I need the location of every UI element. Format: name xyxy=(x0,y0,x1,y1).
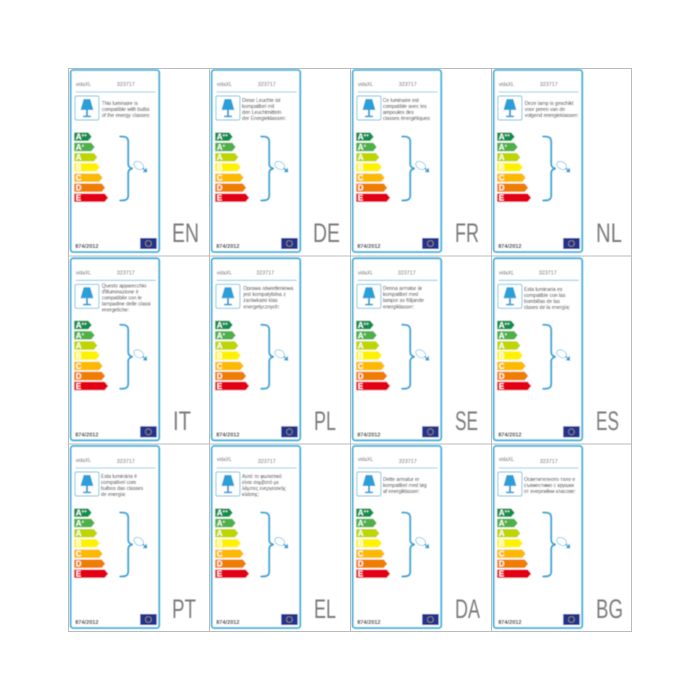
energy class scale: B xyxy=(76,539,82,548)
label frame xyxy=(212,70,300,252)
icon: bulb xyxy=(273,536,288,548)
energy class scale: A xyxy=(358,153,364,162)
compatibility text: Oprawa oświetleniowa xyxy=(243,286,294,292)
icon: bulb xyxy=(132,160,147,172)
energy class scale: A xyxy=(358,509,363,518)
compatibility text: съвместимо с крушки xyxy=(524,483,574,489)
panel: PL xyxy=(212,258,300,440)
energy class scale: C xyxy=(499,550,505,559)
energy class scale: A xyxy=(358,321,363,330)
energy class scale: ++ xyxy=(363,509,369,514)
compatibility text: energetiche: xyxy=(102,308,129,314)
energy class scale: A xyxy=(358,143,363,152)
compatibility text: Αυτό το φωτιστικό xyxy=(242,473,282,480)
energy class scale: C xyxy=(499,362,505,371)
compatibility text: Esta luminária é xyxy=(101,474,137,480)
energy class scale: B xyxy=(358,351,364,360)
language code IT: IT xyxy=(173,406,191,436)
language code FR: FR xyxy=(455,218,479,248)
label frame xyxy=(353,70,441,252)
compatibility text: lampadine delle classi xyxy=(102,302,151,308)
energy class scale: A xyxy=(217,321,222,330)
energy class scale: D xyxy=(499,184,505,193)
energy class scale: A xyxy=(217,341,223,350)
icon: bulb xyxy=(414,160,429,172)
energy class scale: D xyxy=(499,560,505,569)
product code: 323717 xyxy=(258,459,276,465)
compatibility text: d'illuminazione è xyxy=(102,289,139,295)
energy class scale: + xyxy=(222,332,225,337)
energy class scale: A xyxy=(76,341,82,350)
regulation number: 874/2012 xyxy=(498,620,522,626)
energy class scale: A xyxy=(499,153,505,162)
compatibility text: Deze lamp is geschikt xyxy=(525,101,574,107)
energy class scale: ++ xyxy=(81,321,87,326)
compatibility text: volgend energieklassen: xyxy=(525,113,579,119)
compatibility text: bombillas de las xyxy=(524,299,560,305)
energy class scale: B xyxy=(499,163,505,172)
energy class scale: A xyxy=(358,529,364,538)
panel: BG xyxy=(494,446,582,628)
icon: bulb xyxy=(555,536,570,548)
compatibility text: kompatibel mit xyxy=(242,104,275,110)
energy class scale: + xyxy=(222,144,225,148)
energy class scale: E xyxy=(76,570,82,579)
panel: DA xyxy=(353,446,441,628)
icon: lamp xyxy=(216,472,240,496)
energy class scale: A xyxy=(499,143,504,152)
compatibility text: ampoules des xyxy=(383,110,414,116)
compatibility text: jest kompatybilna z xyxy=(242,292,286,298)
panel: PT xyxy=(71,446,159,628)
energy class scale: + xyxy=(363,520,366,524)
bracket xyxy=(261,325,274,389)
energy class scale: ++ xyxy=(222,133,228,138)
compatibility text: κλάσης: xyxy=(242,491,259,498)
compatibility text: de energia: xyxy=(101,492,126,498)
regulation number: 874/2012 xyxy=(75,244,99,250)
bracket xyxy=(402,136,415,200)
energy class scale: A xyxy=(217,519,222,528)
energy class scale: E xyxy=(217,570,223,579)
energy class scale: A xyxy=(76,321,81,330)
language code BG: BG xyxy=(596,594,623,624)
language code EL: EL xyxy=(314,594,336,624)
bracket xyxy=(402,512,415,576)
energy class scale: + xyxy=(504,332,507,337)
regulation number: 874/2012 xyxy=(357,432,381,438)
icon: lamp xyxy=(357,472,381,496)
energy class scale: B xyxy=(217,539,223,548)
compatibility text: kompatibel med løg xyxy=(383,483,427,489)
brand: vidaXL xyxy=(499,270,514,276)
compatibility text: This luminaire is xyxy=(102,101,138,107)
energy class scale: A xyxy=(217,529,223,538)
energy class scale: C xyxy=(358,174,364,183)
icon: EU flag xyxy=(422,238,439,249)
bracket xyxy=(261,136,274,200)
energy class scale: + xyxy=(81,332,84,337)
label frame xyxy=(71,258,159,440)
bracket xyxy=(120,325,133,389)
label frame xyxy=(71,70,159,252)
energy class scale: A xyxy=(76,153,82,162)
label frame xyxy=(353,446,441,628)
compatibility text: Ce luminaire est xyxy=(383,98,419,104)
energy class scale: D xyxy=(217,372,223,381)
energy class scale: C xyxy=(76,174,82,183)
compatibility text: compatible with bulbs xyxy=(102,107,150,113)
compatibility text: Esta luminaria es xyxy=(524,287,563,293)
brand: vidaXL xyxy=(358,270,373,276)
compatibility text: Questo apparecchio xyxy=(102,283,147,289)
compatibility text: classes énergétiques: xyxy=(383,116,431,122)
panel: EN xyxy=(71,70,159,252)
icon: EU flag xyxy=(422,614,439,625)
energy class scale xyxy=(215,321,249,391)
icon: EU flag xyxy=(563,426,580,437)
energy class scale: E xyxy=(76,194,82,203)
regulation number: 874/2012 xyxy=(498,244,522,250)
language code PL: PL xyxy=(314,406,336,436)
energy class scale: E xyxy=(76,382,82,391)
icon: bulb xyxy=(414,536,429,548)
icon: lamp xyxy=(75,472,99,496)
energy class scale xyxy=(356,321,390,391)
energy class scale: D xyxy=(358,372,364,381)
energy class scale: D xyxy=(217,560,223,569)
icon: EU flag xyxy=(563,238,580,249)
icon: EU flag xyxy=(281,426,298,437)
energy class scale: A xyxy=(76,519,81,528)
energy class scale: ++ xyxy=(81,133,87,138)
label frame xyxy=(353,258,441,440)
language code PT: PT xyxy=(172,594,196,624)
brand: vidaXL xyxy=(217,270,232,276)
product code: 323717 xyxy=(399,459,417,465)
language code EN: EN xyxy=(172,218,199,248)
energy class scale: A xyxy=(499,509,504,518)
product code: 323717 xyxy=(117,270,135,276)
language code ES: ES xyxy=(596,406,619,436)
bracket xyxy=(402,325,415,389)
icon: bulb xyxy=(273,160,288,172)
energy class scale: A xyxy=(358,133,363,142)
product code: 323717 xyxy=(540,82,558,88)
icon: EU flag xyxy=(140,238,157,249)
product code: 323717 xyxy=(256,270,274,276)
compatibility text: energiklasser: xyxy=(383,304,414,310)
icon: lamp xyxy=(75,284,99,308)
regulation number: 874/2012 xyxy=(216,244,240,250)
product code: 323717 xyxy=(258,82,276,88)
energy class scale xyxy=(497,132,531,203)
icon: lamp xyxy=(216,96,240,120)
energy class scale: ++ xyxy=(363,321,369,326)
bracket xyxy=(120,136,133,200)
regulation number: 874/2012 xyxy=(357,620,381,626)
language code DA: DA xyxy=(455,594,480,624)
brand: vidaXL xyxy=(499,82,514,88)
icon: bulb xyxy=(555,160,570,172)
compatibility text: Осветителното тяло е xyxy=(524,477,575,483)
brand: vidaXL xyxy=(358,457,373,463)
icon: bulb xyxy=(132,536,147,548)
icon: lamp xyxy=(216,284,240,308)
compatibility text: energetycznych: xyxy=(243,304,280,310)
energy class scale xyxy=(497,508,531,579)
label frame xyxy=(212,446,300,628)
energy class scale: A xyxy=(499,321,504,330)
energy class scale: C xyxy=(217,550,223,559)
icon: lamp xyxy=(357,96,381,120)
energy class scale: D xyxy=(76,372,82,381)
energy class scale: B xyxy=(499,539,505,548)
energy class scale: A xyxy=(76,331,81,340)
energy class scale: ++ xyxy=(504,509,510,514)
energy class scale: ++ xyxy=(222,509,228,514)
product code: 323717 xyxy=(540,459,558,465)
regulation number: 874/2012 xyxy=(216,620,240,626)
energy class scale: B xyxy=(76,351,82,360)
energy class scale: D xyxy=(76,560,82,569)
icon: bulb xyxy=(132,348,147,361)
energy class scale: D xyxy=(358,560,364,569)
energy class scale: E xyxy=(217,194,223,203)
energy class scale: ++ xyxy=(81,509,87,514)
brand: vidaXL xyxy=(76,270,91,276)
bracket xyxy=(261,512,274,576)
icon: lamp xyxy=(498,96,522,120)
product code: 323717 xyxy=(539,270,557,276)
energy class scale: + xyxy=(81,520,84,524)
energy class scale: A xyxy=(217,509,222,518)
icon: lamp xyxy=(75,96,99,120)
energy class scale: + xyxy=(81,144,84,148)
energy class scale: B xyxy=(76,163,82,172)
icon: lamp xyxy=(498,472,522,496)
energy class scale: E xyxy=(358,194,364,203)
compatibility text: от енергийни класове: xyxy=(524,488,576,495)
energy class scale: ++ xyxy=(504,133,510,138)
energy class scale: A xyxy=(217,133,222,142)
energy class scale: + xyxy=(504,520,507,524)
energy class scale: B xyxy=(217,163,223,172)
label frame xyxy=(494,258,582,440)
panel: IT xyxy=(71,258,159,440)
panel: FR xyxy=(353,70,441,252)
energy class scale: C xyxy=(358,362,364,371)
energy class scale: A xyxy=(76,133,81,142)
energy class scale: A xyxy=(499,519,504,528)
brand: vidaXL xyxy=(358,82,373,88)
product code: 323717 xyxy=(117,459,135,465)
product code: 323717 xyxy=(117,82,135,88)
energy class scale: A xyxy=(499,529,505,538)
energy class scale xyxy=(74,508,108,579)
language code NL: NL xyxy=(596,218,622,248)
compatibility text: compatibile con le xyxy=(102,295,142,301)
compatibility text: af energiklasser: xyxy=(383,489,420,495)
compatibility text: lampor av följande xyxy=(383,298,424,304)
label frame xyxy=(212,258,300,440)
energy class scale: E xyxy=(358,382,364,391)
energy class scale: ++ xyxy=(363,133,369,138)
energy class scale: + xyxy=(222,520,225,524)
energy class scale: C xyxy=(358,550,364,559)
compatibility text: bulbos das classes xyxy=(101,486,144,492)
brand: vidaXL xyxy=(217,82,232,88)
energy class scale: B xyxy=(358,539,364,548)
panel: ES xyxy=(494,258,582,440)
label frame xyxy=(494,446,582,628)
bracket xyxy=(543,512,556,576)
brand: vidaXL xyxy=(76,458,91,464)
energy class scale: B xyxy=(358,163,364,172)
compatibility text: clases de la energía: xyxy=(524,305,570,311)
brand: vidaXL xyxy=(499,457,514,463)
brand: vidaXL xyxy=(76,82,91,88)
energy class scale: E xyxy=(499,194,505,203)
energy class scale: D xyxy=(499,372,505,381)
energy class scale: + xyxy=(504,144,507,148)
compatibility text: den Leuchtmitteln xyxy=(242,110,282,116)
compatibility text: kompatibel med xyxy=(383,292,419,298)
energy class scale: D xyxy=(217,184,223,193)
energy class scale: A xyxy=(499,133,504,142)
energy class scale: A xyxy=(217,153,223,162)
compatibility text: Denna armatur är xyxy=(383,286,423,292)
energy class scale: + xyxy=(363,144,366,148)
energy class scale xyxy=(356,508,390,579)
compatibility text: Diese Leuchte ist xyxy=(242,98,281,104)
icon: EU flag xyxy=(563,614,580,625)
energy class scale: A xyxy=(358,341,364,350)
compatibility text: λάμπες ενεργειακής xyxy=(242,485,286,492)
compatibility text: είναι συμβατό με xyxy=(242,479,280,486)
energy class scale: A xyxy=(358,519,363,528)
energy class scale xyxy=(497,321,531,391)
icon: EU flag xyxy=(281,238,298,249)
product code: 323717 xyxy=(398,270,416,276)
sheet grid xyxy=(68,68,632,632)
compatibility text: voor peren van de xyxy=(525,107,565,113)
energy class scale: A xyxy=(217,331,222,340)
icon: lamp xyxy=(498,284,522,308)
icon: EU flag xyxy=(140,614,157,625)
regulation number: 874/2012 xyxy=(75,620,99,626)
energy class scale xyxy=(74,321,108,391)
label frame xyxy=(494,70,582,252)
compatibility text: der Energieklassen: xyxy=(242,116,286,122)
energy class scale: ++ xyxy=(504,321,510,326)
compatibility text: compatible avec les xyxy=(383,104,427,110)
energy class scale: A xyxy=(76,509,81,518)
panel: DE xyxy=(212,70,300,252)
panel: EL xyxy=(212,446,300,628)
energy class scale: + xyxy=(363,332,366,337)
icon: EU flag xyxy=(422,426,439,437)
brand: vidaXL xyxy=(217,457,232,463)
energy class scale: D xyxy=(76,184,82,193)
icon: bulb xyxy=(273,348,288,361)
regulation number: 874/2012 xyxy=(216,432,240,438)
regulation number: 874/2012 xyxy=(357,244,381,250)
icon: EU flag xyxy=(281,614,298,625)
compatibility text: of the energy classes: xyxy=(102,113,150,119)
energy class scale: A xyxy=(217,143,222,152)
energy class scale: A xyxy=(76,529,82,538)
label frame xyxy=(71,446,159,628)
energy class scale: B xyxy=(217,351,223,360)
energy class scale xyxy=(215,132,249,203)
energy class scale xyxy=(215,508,249,579)
regulation number: 874/2012 xyxy=(75,432,99,438)
icon: bulb xyxy=(555,348,570,361)
bracket xyxy=(120,512,133,576)
energy class scale: A xyxy=(499,341,505,350)
icon: EU flag xyxy=(140,426,157,437)
energy class scale: E xyxy=(217,382,223,391)
energy class scale: A xyxy=(358,331,363,340)
compatibility text: żarówkami klas xyxy=(243,298,278,304)
energy class scale: C xyxy=(76,550,82,559)
compatibility text: compatível com xyxy=(101,480,136,486)
icon: bulb xyxy=(414,348,429,361)
bracket xyxy=(543,325,556,389)
icon: lamp xyxy=(357,284,381,308)
energy class scale: ++ xyxy=(222,321,228,326)
panel: SE xyxy=(353,258,441,440)
energy class scale: E xyxy=(499,382,505,391)
energy class scale: E xyxy=(499,570,505,579)
energy class scale: C xyxy=(76,362,82,371)
language code SE: SE xyxy=(455,406,478,436)
compatibility text: Dette armatur er xyxy=(383,477,420,483)
language code DE: DE xyxy=(313,218,340,248)
energy class scale: D xyxy=(358,184,364,193)
energy class scale: A xyxy=(76,143,81,152)
product code: 323717 xyxy=(399,82,417,88)
energy class scale: C xyxy=(217,362,223,371)
regulation number: 874/2012 xyxy=(498,432,522,438)
energy class scale: E xyxy=(358,570,364,579)
compatibility text: compatible con las xyxy=(524,293,566,299)
energy class scale: A xyxy=(499,331,504,340)
panel: NL xyxy=(494,70,582,252)
energy class scale: B xyxy=(499,351,505,360)
energy class scale xyxy=(356,132,390,203)
energy class scale: C xyxy=(499,174,505,183)
energy class scale xyxy=(74,132,108,203)
bracket xyxy=(543,136,556,200)
energy class scale: C xyxy=(217,174,223,183)
